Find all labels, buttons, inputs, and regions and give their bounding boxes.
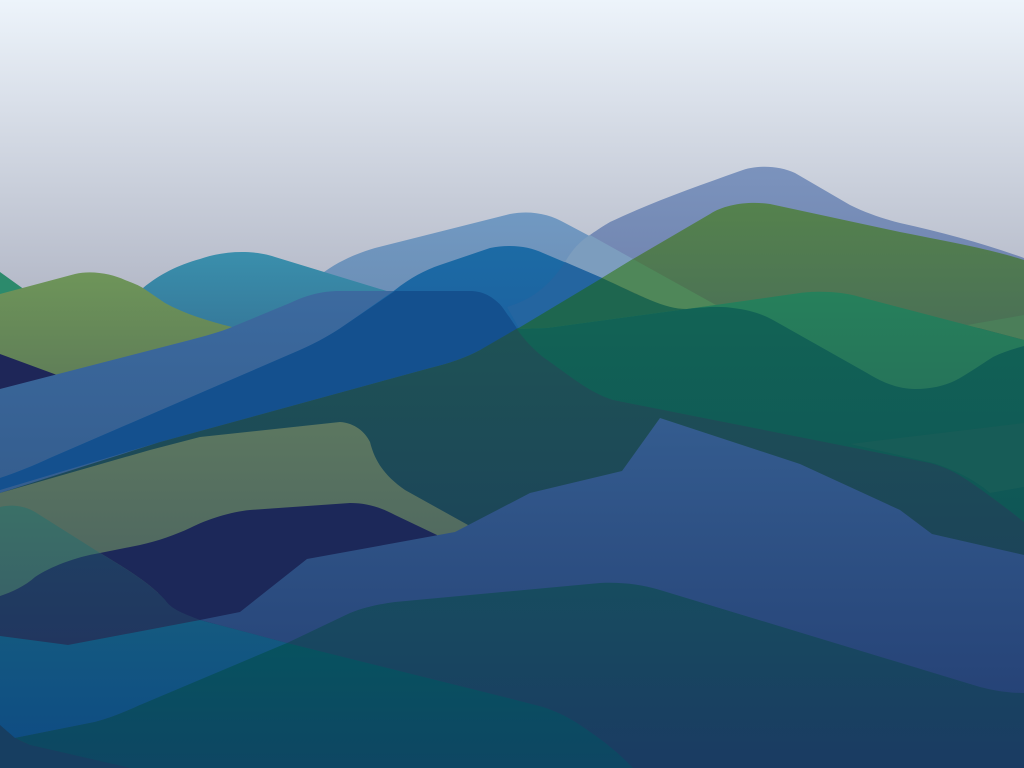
deep blue and periwinkle overlap — [507, 262, 602, 330]
far-left green peak — [0, 272, 25, 300]
blue ridge — [0, 291, 520, 500]
deep blue over ridge — [0, 291, 518, 490]
sage hill — [0, 422, 468, 600]
deep blue hill — [0, 246, 602, 490]
middle teal foreground hill — [15, 643, 633, 768]
front blue plateau — [200, 418, 1024, 768]
dark green ridge — [517, 307, 1024, 522]
dark navy left hill — [0, 553, 200, 645]
steel and periwinkle overlap — [565, 235, 633, 278]
bottom left navy wedge — [0, 725, 130, 768]
large dark teal mountain — [0, 328, 1024, 768]
lighter green right patch — [850, 423, 1024, 493]
periwinkle back mountain — [507, 167, 1024, 345]
teal hill — [143, 252, 390, 340]
olive hill — [0, 272, 232, 395]
green band hill — [517, 292, 1024, 400]
steel blue hill — [320, 212, 716, 345]
green mountain — [517, 203, 1024, 350]
lower big teal hill — [287, 583, 1024, 768]
light green overlap — [602, 259, 716, 309]
dark green wedge — [517, 278, 687, 329]
teal green left hill — [0, 506, 100, 596]
navy left wedge — [0, 354, 57, 390]
bright blue left hill — [0, 620, 287, 745]
right green sliver — [967, 315, 1024, 340]
navy centre hill — [100, 503, 437, 625]
